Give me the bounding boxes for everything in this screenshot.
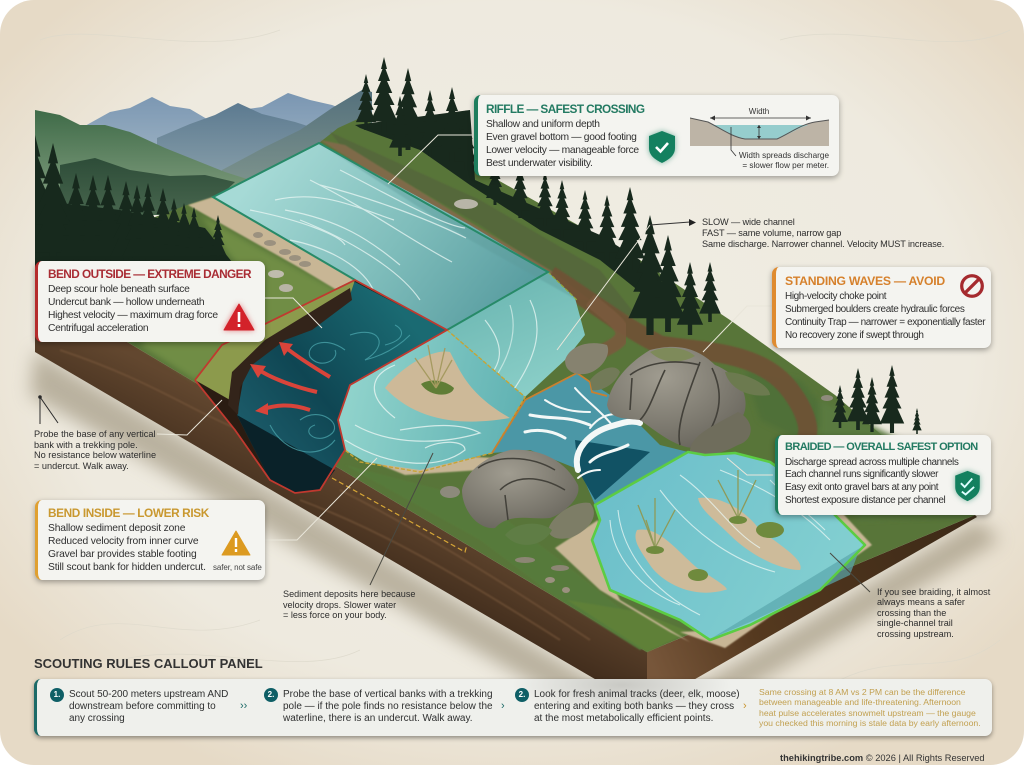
leader lines	[157, 135, 870, 592]
card: braided overall safest	[775, 435, 991, 515]
rule 3: 2.	[519, 690, 525, 699]
rule 1: downstream before committing to	[69, 701, 216, 712]
zone: bend outside pool	[195, 280, 447, 493]
note: probe the bank: Probe the base of any vertical	[34, 429, 156, 439]
bend inside list	[48, 523, 206, 573]
ground shadow	[30, 350, 1000, 716]
dark arrowhead for slow label	[689, 219, 696, 226]
note: slow fast: SLOW — wide channel	[702, 217, 795, 227]
zone: braided channels	[592, 452, 865, 640]
standing waves list: Submerged boulders create hydraulic forces	[785, 304, 964, 314]
bend inside list: Shallow sediment deposit zone	[48, 523, 185, 534]
rule 1: 1.	[54, 690, 60, 699]
note: braiding	[877, 587, 990, 639]
rule 3	[515, 688, 740, 724]
rule 3: at the most metabolically efficient points.	[534, 713, 713, 724]
distant mountains	[83, 90, 372, 200]
card: bend inside lower risk	[35, 500, 265, 580]
braided list	[785, 456, 958, 506]
rule 2: 2.	[268, 690, 274, 699]
dirt trail	[550, 275, 808, 440]
bend outside list: Centrifugal acceleration	[48, 323, 148, 334]
grass texture and banks	[140, 132, 975, 652]
bend inside list: Gravel bar provides stable footing	[48, 549, 197, 560]
rule 1	[50, 688, 228, 724]
card: standing waves avoid	[772, 267, 991, 348]
note: slow fast	[702, 217, 944, 249]
bend inside list: Still scout bank for hidden undercut.	[48, 562, 206, 573]
rule 1: any crossing	[69, 713, 125, 724]
bend outside list	[48, 284, 218, 334]
timing warning	[759, 686, 981, 728]
braided list: Easy exit onto gravel bars at any point	[785, 482, 938, 493]
rule 1: Scout 50-200 meters upstream AND	[69, 689, 228, 700]
flow arrows	[256, 347, 330, 410]
riffle cross section diagram: Width	[749, 107, 769, 116]
riffle heading: RIFFLE — SAFEST CROSSING	[486, 102, 644, 116]
sand strips	[188, 140, 872, 648]
note: braiding: always means a safer	[877, 597, 965, 607]
chevron 3: ›	[743, 700, 747, 712]
rule 2	[264, 688, 493, 724]
rule 3: Look for fresh animal tracks (deer, elk, moose)	[534, 689, 740, 700]
timing warning: heat pulse accelerates snowmelt upstream — the gauge	[759, 708, 976, 718]
pebbles	[253, 199, 833, 593]
bend outside list: Highest velocity — maximum drag force	[48, 310, 218, 321]
boulders: standing waves	[565, 343, 770, 455]
riffle list: Shallow and uniform depth	[486, 118, 600, 130]
rule 2: Probe the base of vertical banks with a trekking	[283, 689, 493, 700]
icon: danger triangle	[221, 302, 257, 334]
bend inside heading: BEND INSIDE — LOWER RISK	[48, 506, 209, 520]
timing warning: you checked this morning is stale data by early afternoon.	[759, 718, 981, 728]
trekking pole icon	[39, 396, 58, 424]
note: sediment deposits: velocity drops. Slower water	[283, 600, 396, 610]
chevron 1: ››	[240, 700, 247, 712]
braided heading: BRAIDED — OVERALL SAFEST OPTION	[785, 440, 978, 452]
zone: standing waves rapids	[492, 373, 688, 505]
bend outside heading: BEND OUTSIDE — EXTREME DANGER	[48, 266, 251, 280]
note: braiding: If you see braiding, it almost	[877, 587, 990, 597]
standing waves list: High-velocity choke point	[785, 290, 886, 302]
rule 3: entering and exiting both banks — they cross	[534, 701, 734, 712]
bend outside list: Deep scour hole beneath surface	[48, 284, 189, 295]
land surface	[35, 118, 975, 652]
soil right face	[647, 515, 977, 682]
note: probe the bank	[34, 429, 156, 471]
timing warning: Same crossing at 8 AM vs 2 PM can be the difference	[759, 686, 966, 696]
note: probe the bank: bank with a trekking pole.	[34, 440, 138, 450]
panel: scouting rules	[34, 679, 992, 736]
note: sediment deposits: = less force on your body.	[283, 610, 387, 620]
bend outside list: Undercut bank — hollow underneath	[48, 297, 204, 308]
note: braiding: crossing than the	[877, 608, 946, 618]
zone: riffle crossing	[213, 143, 585, 397]
timing warning: between manageable and life-threatening. Afternoon	[759, 697, 961, 707]
icon: riffle shield	[645, 128, 679, 166]
zone: bend inside point bar	[338, 330, 525, 472]
standing waves list	[785, 290, 986, 340]
left hills	[35, 110, 250, 215]
note: sediment deposits	[283, 589, 415, 620]
riffle cross section diagram	[690, 107, 830, 170]
footer credit: thehikingtribe.com © 2026 | All Rights Reserved	[780, 753, 985, 763]
chevron 2: ›	[501, 700, 505, 712]
card: riffle safest crossing	[474, 95, 839, 176]
braided list: Each channel runs significantly slower	[785, 469, 938, 480]
riffle list: Lower velocity — manageable force	[486, 144, 639, 156]
note: sediment deposits: Sediment deposits here because	[283, 589, 415, 599]
riffle cross section diagram: Width spreads discharge	[739, 151, 829, 160]
card: bend outside extreme danger	[35, 261, 265, 342]
icon: braided shield	[951, 468, 984, 504]
riffle list	[486, 118, 639, 168]
note: slow fast: FAST — same volume, narrow gap	[702, 228, 841, 238]
boulders: lower bank	[440, 450, 594, 545]
forest: left	[35, 135, 232, 267]
icon: caution triangle	[222, 530, 250, 556]
note: slow fast: Same discharge. Narrower channel. Velocity MUST increase.	[702, 239, 944, 249]
soil left face	[35, 287, 647, 682]
forest: back ridge	[355, 57, 922, 434]
braided list: Shortest exposure distance per channel	[785, 495, 945, 506]
note: braiding: crossing upstream.	[877, 629, 954, 639]
rule 2: waterline, there is an undercut. Walk away.	[283, 713, 473, 724]
icon: no entry	[960, 274, 984, 298]
standing waves list: No recovery zone if swept through	[785, 330, 924, 340]
bend inside list: Reduced velocity from inner curve	[48, 536, 198, 547]
riffle cross section diagram: = slower flow per meter.	[742, 161, 829, 170]
braided list: Discharge spread across multiple channels	[785, 456, 958, 468]
standing waves heading: STANDING WAVES — AVOID	[785, 274, 945, 288]
note: braiding: single-channel trail	[877, 618, 953, 628]
caution caption: safer, not safe	[213, 563, 262, 572]
riffle list: Best underwater visibility.	[486, 158, 592, 168]
standing waves list: Continuity Trap — narrower = exponentially faster	[785, 316, 985, 328]
heading: scouting rules: SCOUTING RULES CALLOUT PANEL	[34, 656, 263, 671]
rule 2: pole — if the pole finds no resistance below the	[283, 701, 493, 712]
note: probe the bank: = undercut. Walk away.	[34, 461, 129, 471]
note: probe the bank: No resistance below waterline	[34, 450, 156, 460]
riffle list: Even gravel bottom — good footing	[486, 132, 637, 142]
